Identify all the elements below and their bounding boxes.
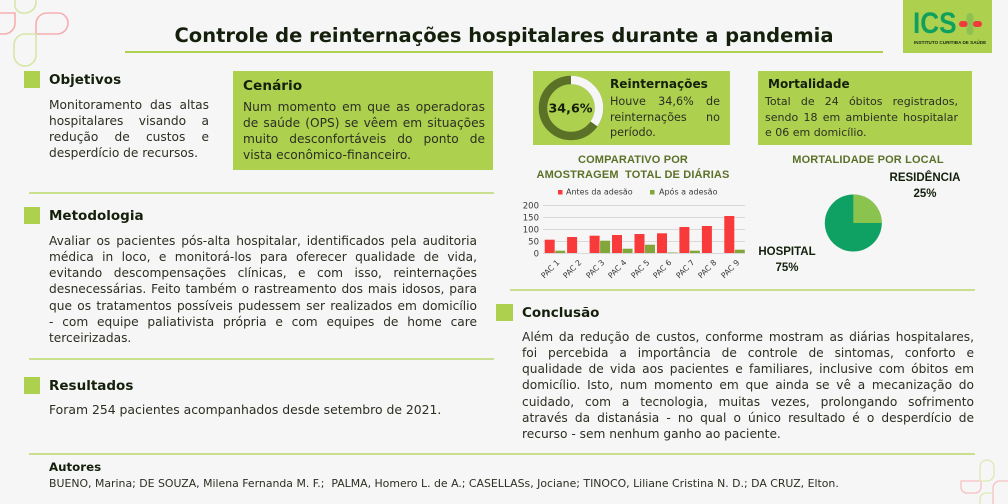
text: mortalidade: e 06 em domicílio.	[765, 126, 866, 139]
label: hospital: 75%	[775, 262, 799, 274]
legend: Antes da adesão	[566, 188, 633, 196]
category labels: PAC 4	[606, 258, 628, 280]
heading: cenário: Cenário	[243, 78, 302, 94]
heading: conclusão: Conclusão	[522, 305, 599, 321]
icon: objetivos bullet	[24, 71, 40, 88]
text: conclusão: cuidado, com a tecnologia, muitas vezes, prolongando sofrimento	[522, 395, 974, 409]
text: metodologia: Avaliar os pacientes pós-alta hospitalar, identificados pela auditoria	[49, 234, 477, 248]
icon: metodologia bullet	[24, 207, 40, 224]
category labels: PAC 7	[674, 258, 696, 280]
text: metodologia: que os tratamentos possíveis pudessem ser realizados em domicílio	[49, 299, 477, 313]
axis labels: 0	[534, 250, 539, 260]
text: objetivos: Monitoramento das altas	[49, 98, 209, 112]
label: hospital: HOSPITAL	[758, 246, 816, 258]
category labels: PAC 2	[561, 258, 583, 280]
axis labels: 150	[523, 214, 539, 224]
label: hospital	[758, 246, 816, 274]
section: conclusão	[496, 304, 974, 441]
text: conclusão: domicílio. Isto, num momento em que ainda se vê a mecanização do	[522, 378, 974, 392]
axis labels: 50	[528, 238, 539, 248]
category labels: PAC 9	[719, 258, 741, 280]
text: conclusão: através da distanásia - no qual o único resultado é o desperdício de	[522, 411, 974, 425]
logo	[903, 0, 992, 53]
chart title: comparativo: AMOSTRAGEM TOTAL DE DIÁRIAS	[536, 169, 730, 181]
section: metodologia	[24, 207, 477, 345]
bars: após	[555, 241, 745, 253]
text: resultados: Foram 254 pacientes acompanhados desde setembro de 2021.	[49, 402, 441, 417]
bar chart: diárias	[523, 186, 745, 280]
bars: antes	[545, 216, 734, 253]
text: mortalidade	[764, 95, 958, 139]
text: objetivos	[49, 98, 209, 160]
text: metodologia: terceirizadas.	[49, 331, 131, 345]
text: reinternações: período.	[610, 126, 656, 139]
text: cenário: muito desconfortáveis do ponto de	[243, 132, 485, 146]
text: conclusão: Além da redução de custos, conforme mostram as diárias hospitalares,	[522, 330, 974, 344]
text: cenário: de saúde (OPS) se vêem em situações	[243, 116, 485, 130]
decorative corner shapes bottom-right	[960, 459, 1008, 504]
legend	[558, 186, 718, 196]
heading: autores: Autores	[49, 460, 101, 474]
chart title: mortalidade por local: MORTALIDADE POR LOCAL	[792, 154, 944, 166]
donut chart: 34,6%: 34,6%	[548, 100, 593, 116]
text: conclusão: qualidade de vida aos pacientes e familiares, inclusive com óbitos em	[522, 362, 974, 376]
text: autores: BUENO, Marina; DE SOUZA, Milena Fernanda M. F.; PALMA, Homero L. de A.; CASELLASs, Jociane; TINOCO, Liliane Cristina N. D.; DA CRUZ, Elton.	[49, 477, 839, 490]
heading: objetivos: Objetivos	[49, 72, 121, 88]
text: mortalidade: sendo 18 em ambiente hospitalar	[765, 110, 958, 124]
panel: cenário	[233, 71, 493, 170]
text: metodologia: evitando descompensações clínicas, e com isso, reinternações	[49, 266, 477, 280]
label: residência: RESIDÊNCIA	[890, 172, 960, 184]
chart title: comparativo	[536, 154, 730, 181]
label: residência: 25%	[913, 188, 937, 200]
text: reinternações: Houve 34,6% de	[610, 95, 720, 108]
title: Controle de reinternações hospitalares durante a pandemia	[174, 24, 834, 47]
icon: conclusão bullet	[496, 304, 513, 321]
heading: mortalidade: Mortalidade	[768, 77, 850, 91]
icon: resultados bullet	[24, 377, 40, 394]
text: reinternações: reinternações no	[610, 110, 720, 124]
text: reinternações	[610, 95, 720, 139]
text: objetivos: redução de custos e	[49, 130, 209, 144]
logo subtitle: INSTITUTO CURITIBA DE SAÚDE	[914, 40, 986, 45]
heading: resultados: Resultados	[49, 378, 133, 394]
text: metodologia: médica in loco, e monitorá-los para oferecer qualidade de vida,	[49, 250, 477, 264]
section: autores	[49, 460, 839, 490]
category labels	[539, 258, 741, 280]
axis labels: 200	[523, 202, 539, 212]
text: conclusão: foi percebida a importância de controle de sintomas, conforto e	[522, 346, 974, 360]
heading: reinternações: Reinternações	[610, 77, 708, 91]
text: mortalidade: Total de 24 óbitos registrados,	[765, 95, 958, 108]
category labels: PAC 3	[584, 258, 606, 280]
category labels: PAC 1	[539, 258, 561, 280]
chart title: comparativo: COMPARATIVO POR	[578, 154, 688, 166]
decorative corner shapes top-left	[0, 0, 69, 67]
logo wordmark: ICS	[913, 7, 957, 40]
logo cross	[959, 13, 982, 35]
text: objetivos: desperdício de recursos.	[49, 146, 198, 160]
text: cenário: Num momento em que as operadoras	[243, 100, 485, 114]
donut chart: 34,6%	[538, 76, 604, 140]
text: cenário: vista econômico-financeiro.	[243, 148, 411, 162]
text: metodologia: - com equipe paliativista própria e com equipes de home care	[49, 315, 477, 329]
panel: mortalidade	[758, 71, 972, 145]
text: metodologia	[49, 234, 477, 345]
panel: reinternações	[533, 71, 730, 145]
text: objetivos: hospitalares visando a	[49, 114, 209, 128]
text: cenário	[243, 100, 485, 162]
text: conclusão: recurso - sem nenhum ganho ao paciente.	[522, 427, 781, 441]
axis labels	[523, 202, 539, 260]
heading: metodologia: Metodologia	[49, 208, 144, 224]
text: conclusão	[522, 330, 974, 441]
pie chart: mortalidade por local	[824, 194, 882, 252]
category labels: PAC 8	[696, 258, 718, 280]
section: resultados	[24, 377, 441, 417]
legend: Após a adesão	[659, 186, 718, 196]
axis labels: 100	[523, 226, 539, 236]
category labels: PAC 5	[629, 258, 651, 280]
section: objetivos	[24, 71, 209, 160]
label: residência	[890, 170, 960, 200]
category labels: PAC 6	[651, 258, 673, 280]
text: metodologia: desnecessárias. Feito também o rastreamento dos mais idosos, para	[49, 282, 477, 296]
